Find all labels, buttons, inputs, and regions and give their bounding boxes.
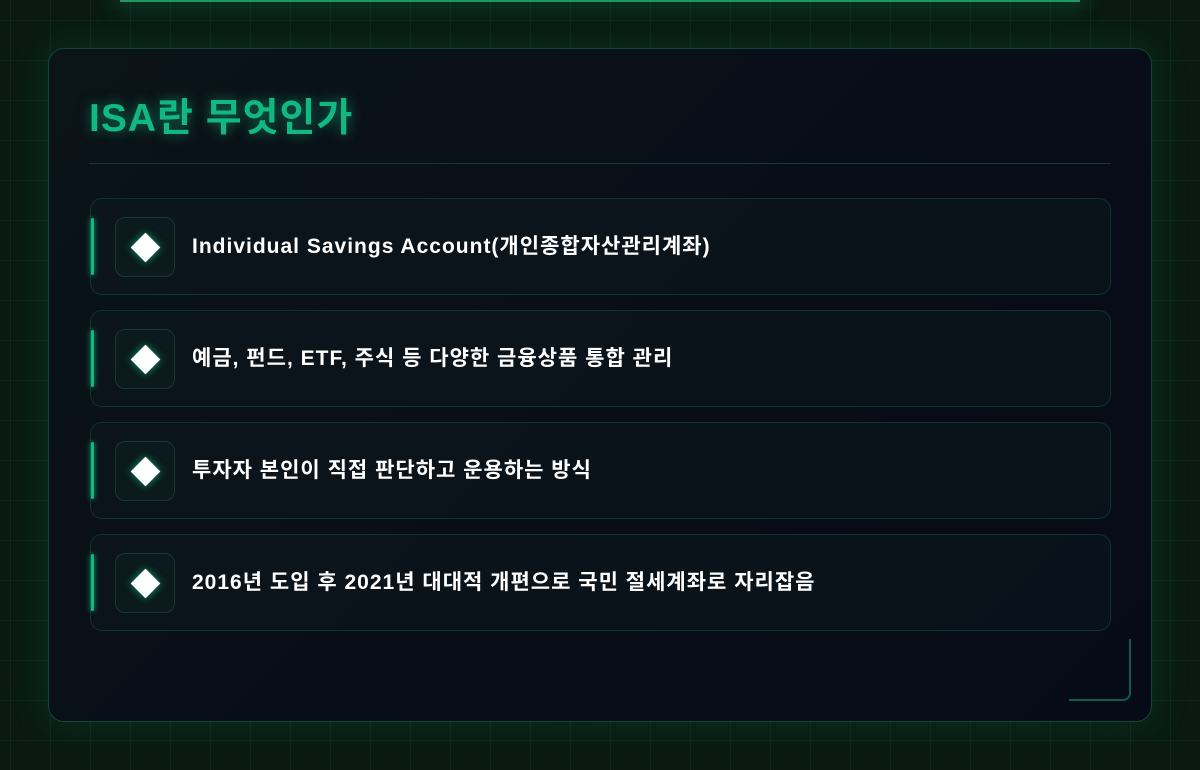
text 1: Individual Savings Account(개인종합자산관리계좌)	[192, 235, 711, 258]
item 3	[90, 422, 1111, 519]
icon: diamond	[115, 553, 175, 613]
icon: diamond	[115, 217, 175, 277]
item 1	[90, 198, 1111, 295]
icon: diamond	[115, 329, 175, 389]
text 2: 예금, 펀드, ETF, 주식 등 다양한 금융상품 통합 관리	[192, 347, 673, 370]
text 3: 투자자 본인이 직접 판단하고 운용하는 방식	[192, 459, 592, 482]
title: ISA란 무엇인가	[89, 97, 353, 140]
item 4	[90, 534, 1111, 631]
text 4: 2016년 도입 후 2021년 대대적 개편으로 국민 절세계좌로 자리잡음	[192, 571, 815, 594]
icon: diamond	[115, 441, 175, 501]
item 2	[90, 310, 1111, 407]
